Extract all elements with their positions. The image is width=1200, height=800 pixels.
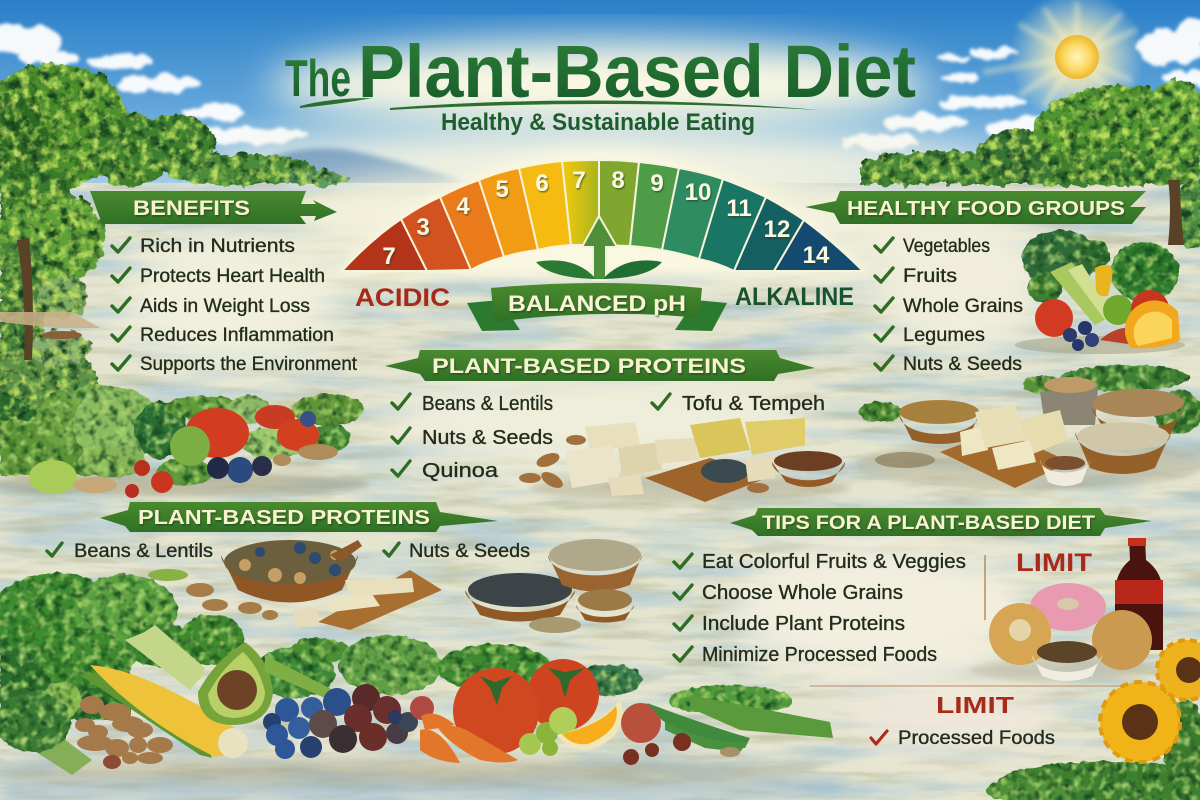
tips list: Include Plant Proteins xyxy=(702,613,905,635)
panel: plant-based proteins (middle) xyxy=(385,350,850,502)
title swoosh xyxy=(300,98,820,110)
gauge numbers: 10 xyxy=(685,179,711,206)
gauge numbers: 4 xyxy=(456,193,470,220)
lower proteins list xyxy=(47,541,530,562)
lower proteins ribbon: PLANT-BASED PROTEINS xyxy=(138,507,430,529)
gauge numbers xyxy=(382,167,830,270)
illustration: seed and grain bowls xyxy=(465,539,642,633)
tomatoes xyxy=(453,659,599,754)
balanced pH ribbon xyxy=(467,283,727,331)
background: sun xyxy=(985,0,1145,125)
subtitle: Healthy & Sustainable Eating xyxy=(441,109,755,136)
food groups list xyxy=(875,236,1023,375)
benefits list: Supports the Environment xyxy=(140,354,358,375)
gauge numbers: 7 xyxy=(572,167,586,194)
food groups ribbon: HEALTHY FOOD GROUPS xyxy=(847,198,1125,220)
left foliage xyxy=(0,63,350,455)
blueberries and plums xyxy=(263,684,434,759)
food groups list: Nuts & Seeds xyxy=(903,354,1022,375)
illustration: tofu, tempeh and almonds xyxy=(519,418,850,502)
proteins list: Beans & Lentils xyxy=(422,393,553,415)
title halo xyxy=(270,41,930,129)
trees: right xyxy=(860,80,1200,249)
illustration: bean bowl and tofu board xyxy=(148,539,642,633)
panel: tips for a plant-based diet xyxy=(674,508,1163,749)
tips list: Eat Colorful Fruits & Veggies xyxy=(702,551,966,573)
tips list: Minimize Processed Foods xyxy=(702,644,937,666)
balanced pH ribbon: BALANCED pH xyxy=(508,291,686,316)
balance arrow with leaves xyxy=(536,216,662,280)
benefits list xyxy=(112,236,358,375)
tips list: Choose Whole Grains xyxy=(702,582,903,604)
gauge numbers: 12 xyxy=(764,216,790,243)
trees: left xyxy=(0,63,350,455)
title xyxy=(270,30,930,136)
tips list xyxy=(674,551,966,666)
gauge numbers: 11 xyxy=(726,195,752,222)
alkaline label: ALKALINE xyxy=(735,283,854,311)
limit item: Processed Foods xyxy=(898,728,1055,749)
gauge numbers: 14 xyxy=(803,242,830,269)
tips ribbon: TIPS FOR A PLANT-BASED DIET xyxy=(762,513,1095,534)
title: The: The xyxy=(285,50,351,108)
acidic label: ACIDIC xyxy=(355,284,450,312)
illustration: tofu and grain bowls right xyxy=(855,365,1200,490)
benefits ribbon: BENEFITS xyxy=(133,197,250,220)
proteins list: Nuts & Seeds xyxy=(422,427,553,449)
gauge numbers: 6 xyxy=(535,170,549,197)
right foliage xyxy=(860,80,1200,249)
gauge segments xyxy=(342,160,863,271)
gauge numbers: 5 xyxy=(495,176,509,203)
background: sky xyxy=(0,0,1200,215)
panel: healthy food groups xyxy=(805,191,1185,375)
food groups list: Whole Grains xyxy=(903,296,1023,317)
panel: benefits xyxy=(90,191,358,375)
avocado xyxy=(198,642,273,725)
benefits ribbon xyxy=(90,191,337,224)
lettuces and leaves xyxy=(0,384,364,486)
limit heading two: LIMIT xyxy=(936,692,1014,718)
title: Plant-Based Diet: Plant-Based Diet xyxy=(358,30,916,113)
carrots xyxy=(420,713,518,763)
pH gauge xyxy=(330,150,875,331)
corn xyxy=(90,665,245,757)
panel: plant-based proteins (lower left) xyxy=(47,502,642,633)
proteins ribbon: PLANT-BASED PROTEINS xyxy=(432,355,746,378)
limit heading one: LIMIT xyxy=(1016,549,1092,577)
broccoli xyxy=(0,692,92,775)
benefits list: Protects Heart Health xyxy=(140,266,325,287)
tips ribbon xyxy=(730,508,1152,536)
background: pale ground xyxy=(0,165,1200,800)
proteins list: Tofu & Tempeh xyxy=(682,393,825,415)
food groups list: Vegetables xyxy=(903,236,990,257)
nuts xyxy=(75,696,173,769)
illustration: vegetables and fruit xyxy=(1015,230,1185,354)
gauge numbers: 7 xyxy=(382,243,396,270)
citrus and greens xyxy=(519,695,833,765)
proteins list: Quinoa xyxy=(422,460,499,482)
lower proteins list: Nuts & Seeds xyxy=(409,541,530,562)
proteins list xyxy=(392,393,825,482)
beans xyxy=(265,655,333,698)
benefits list: Aids in Weight Loss xyxy=(140,296,310,317)
celery xyxy=(125,625,205,690)
food groups list: Fruits xyxy=(903,266,957,287)
proteins ribbon xyxy=(385,350,815,381)
benefits list: Rich in Nutrients xyxy=(140,236,295,257)
benefits list: Reduces Inflammation xyxy=(140,325,334,346)
gauge numbers: 8 xyxy=(611,167,625,194)
lower proteins ribbon xyxy=(100,502,498,532)
illustration: bottom vegetable pile xyxy=(0,573,833,784)
leafy greens xyxy=(0,573,792,720)
illustration: left vegetable pile xyxy=(0,384,370,498)
husk xyxy=(80,670,212,758)
food groups list: Legumes xyxy=(903,325,985,346)
gauge numbers: 3 xyxy=(416,214,430,241)
lower proteins list: Beans & Lentils xyxy=(74,541,213,562)
illustration: processed foods xyxy=(970,538,1163,682)
food groups ribbon xyxy=(805,191,1146,224)
illustration: sunflowers and foliage xyxy=(985,640,1200,800)
gauge numbers: 9 xyxy=(650,170,664,197)
